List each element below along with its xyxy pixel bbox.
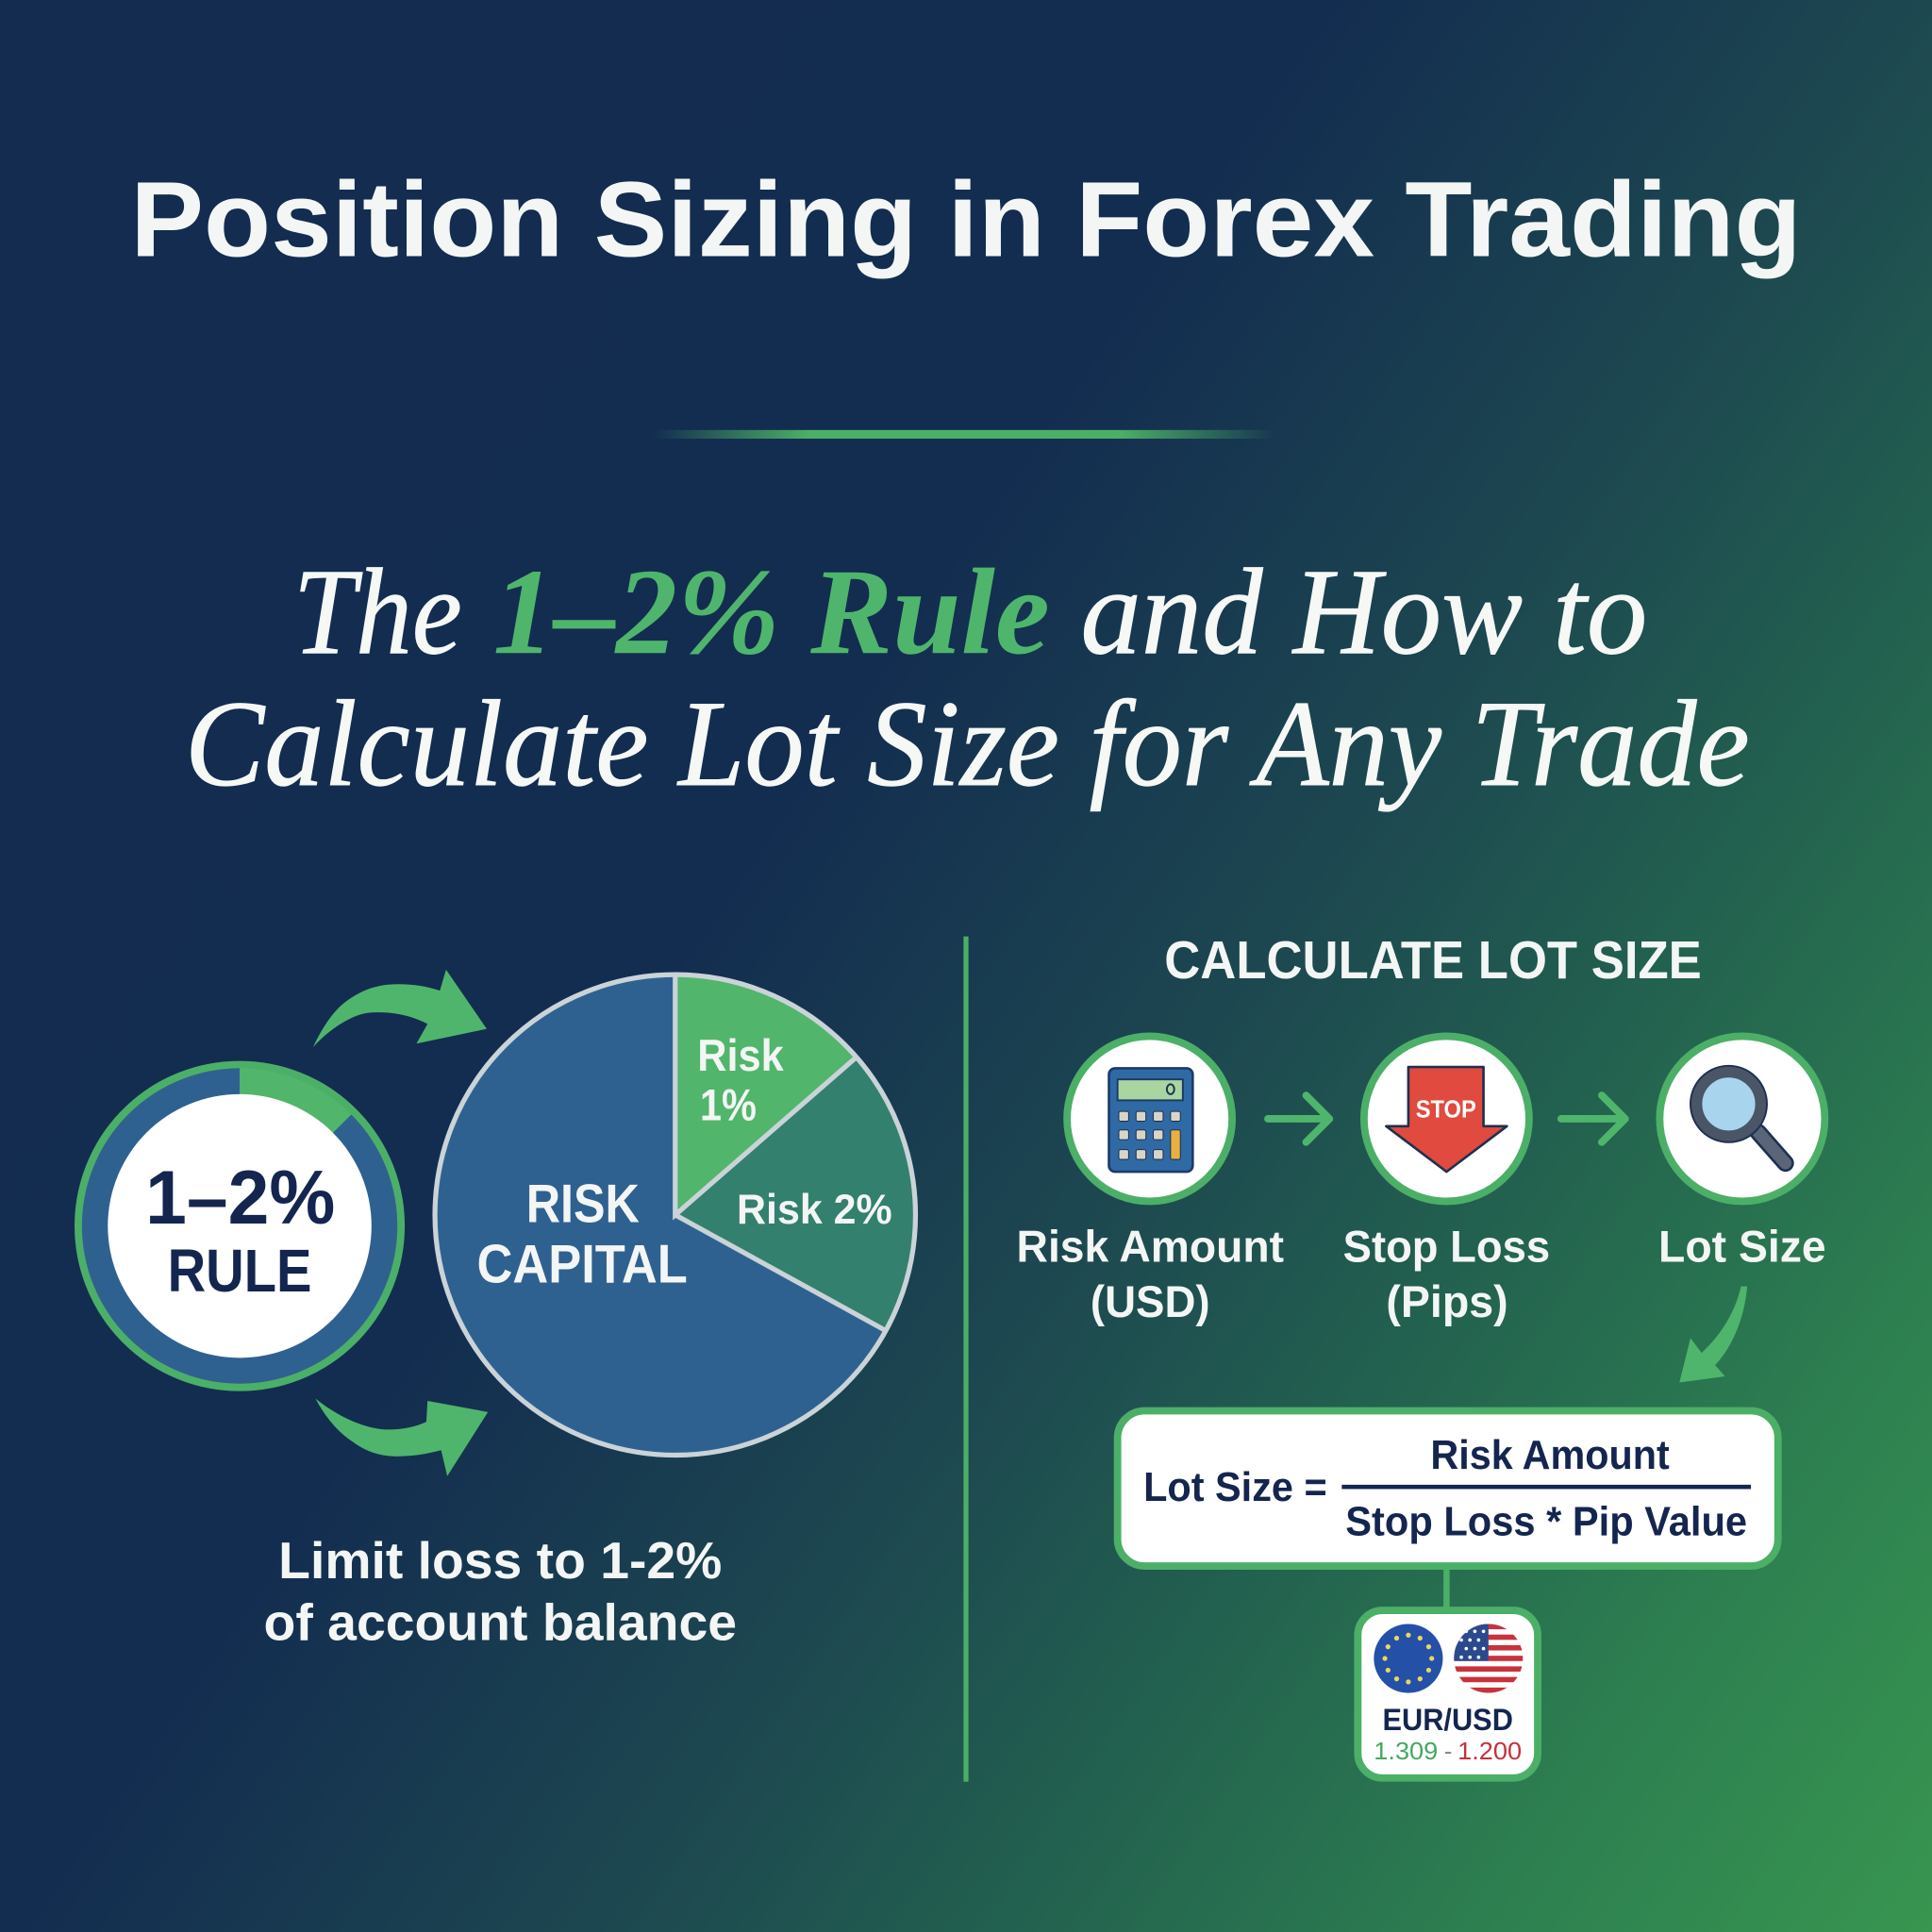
step labels: Risk Amount [1017,1221,1284,1271]
subtitle: and How to [1080,544,1647,680]
caption: limit loss: Limit loss to 1-2% [278,1531,722,1590]
step labels: Lot Size [1658,1221,1826,1271]
icon: calculator [1067,1036,1232,1201]
step labels: (USD) [1091,1276,1210,1326]
icon: magnifier [1659,1036,1824,1201]
subtitle: The [293,544,462,680]
pie chart: risk capital: RISK [526,1174,640,1235]
subtitle: 1–2% Rule [492,544,1050,680]
formula card: Lot Size = [1143,1465,1327,1510]
pie chart: risk capital: Risk [697,1030,784,1080]
ring badge: RULE [168,1237,311,1305]
icon: stop arrow: STOP [1416,1095,1476,1124]
price range [1374,1737,1522,1765]
pie chart: risk capital: CAPITAL [476,1235,688,1295]
arrow: top curved [313,970,487,1047]
formula card: Stop Loss * Pip Value [1345,1499,1747,1544]
panel: 1-2% rule [78,970,916,1651]
price range: - [1444,1737,1452,1765]
price range: 1.309 [1374,1737,1438,1765]
currency pair card [1357,1610,1538,1778]
step labels: Stop Loss [1343,1221,1550,1271]
arrow: curved to formula [1679,1287,1747,1382]
step labels [1017,1221,1826,1326]
pie chart: risk capital [435,974,916,1456]
icon: US flag [1454,1624,1523,1693]
ring badge [78,1064,401,1388]
subtitle: Calculate Lot Size for Any Trade [185,676,1750,812]
formula card: Risk Amount [1430,1433,1670,1478]
icon: stop arrow [1364,1036,1529,1201]
price range: 1.200 [1457,1737,1522,1765]
icon: EU flag [1374,1624,1442,1693]
caption: limit loss: of account balance [264,1592,737,1651]
ring badge: 1–2% [145,1156,335,1241]
caption: limit loss [264,1531,737,1651]
currency pair card: EUR/USD [1382,1702,1513,1737]
panel: calculate lot size [1017,930,1826,1778]
pie chart: risk capital: 1% [700,1079,757,1129]
title: Position Sizing in Forex Trading [130,160,1802,280]
formula card [1118,1411,1778,1566]
pie chart: risk capital: Risk 2% [737,1187,892,1233]
step labels: (Pips) [1386,1276,1508,1326]
arrow: to stop loss [1268,1095,1329,1142]
arrow: bottom curved [315,1398,488,1476]
section heading: CALCULATE LOT SIZE [1164,930,1702,990]
arrow: to lot size [1561,1095,1625,1142]
subtitle [185,544,1750,812]
